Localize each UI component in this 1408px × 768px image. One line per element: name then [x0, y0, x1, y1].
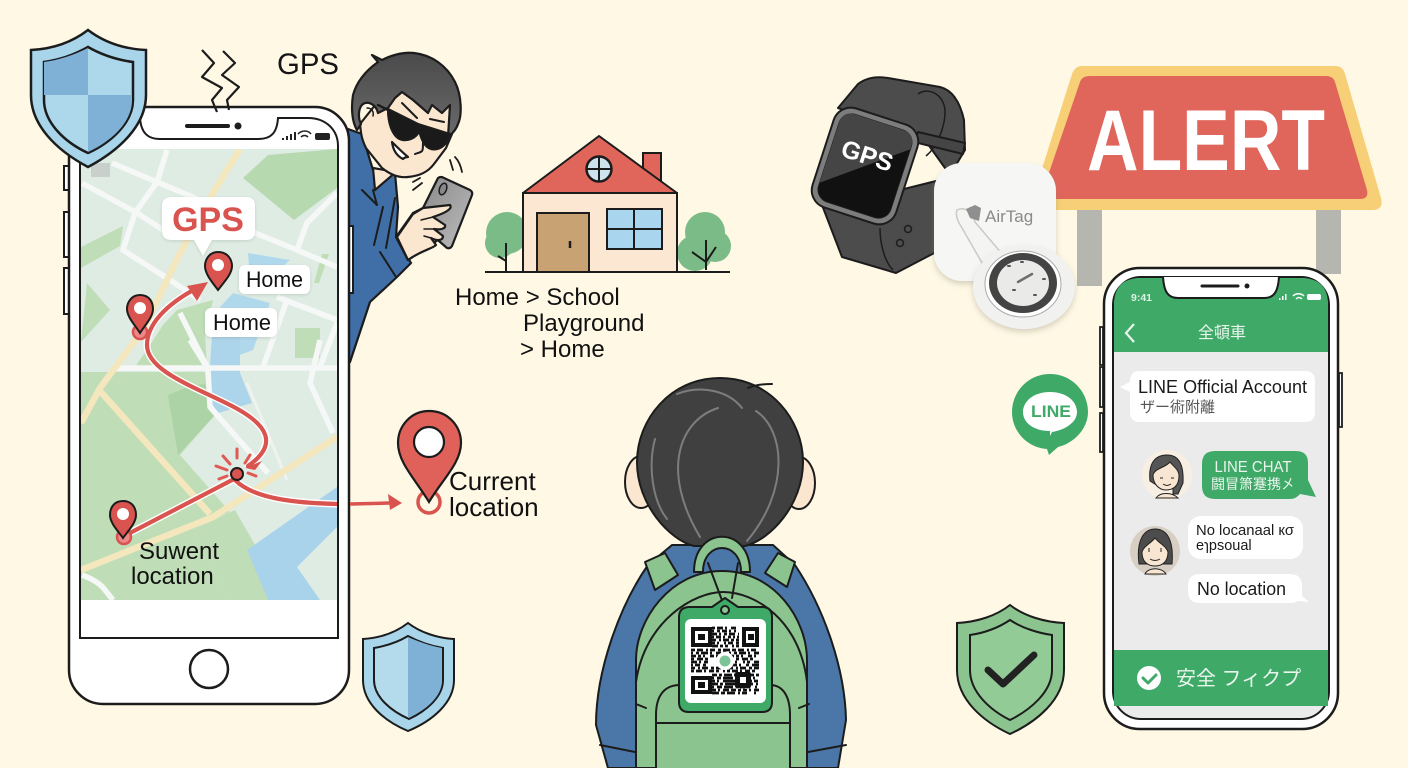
app header: [1114, 277, 1328, 352]
callout: GPS: [162, 197, 255, 256]
pin: start: [110, 501, 136, 544]
illustration: GPS smartwatch: GPS: [838, 135, 897, 178]
app header: 9:41: [1131, 292, 1152, 304]
chat bubble: No location: No location: [1197, 579, 1286, 599]
callout: GPS: GPS: [172, 201, 244, 239]
avatar: woman 1: [1142, 450, 1192, 500]
illustration: AirTag and case: [934, 163, 1075, 329]
avatar: woman 2: [1130, 526, 1180, 576]
burst marker: [216, 449, 256, 480]
chat bubble: LINE Official Account: ザー術附離: [1140, 399, 1215, 416]
icon: small blue shield: [363, 623, 454, 731]
chat bubble: LINE Official Account: LINE Official Account: [1138, 377, 1307, 397]
chat bubble: No location: [1188, 574, 1309, 603]
text: route Home School Playground: Home > School: [455, 284, 620, 311]
label: Current location: location: [449, 492, 539, 522]
hair: [637, 378, 803, 546]
phone frame: [1100, 268, 1342, 729]
label: Current location: Current: [449, 466, 536, 496]
icon: interference squiggles: [202, 50, 239, 112]
chat bubble: LINE CHAT: LINE CHAT: [1214, 459, 1292, 476]
chat bubble: LINE CHAT: 闘冒箫蹇携㐅: [1211, 476, 1295, 492]
arrow: to current location: [350, 494, 402, 510]
footer bar: safety button: [1114, 650, 1328, 706]
small map marker: [91, 163, 110, 177]
face: [360, 85, 452, 177]
AirTag case label: AirTag: [985, 207, 1033, 226]
illustration: child from behind with backpack: [596, 378, 846, 768]
sunglasses: [378, 105, 392, 112]
panel: ALERT sign: ALERT: [1087, 93, 1325, 189]
panel: ALERT sign: [1030, 66, 1382, 286]
icon: green check shield: [957, 605, 1064, 734]
smile: [392, 142, 408, 159]
pin: current location: [398, 411, 461, 513]
pin: home: [205, 252, 232, 290]
ears: [625, 456, 657, 508]
illustration: GPS smartwatch: [807, 77, 965, 273]
held phone and hand: [396, 208, 438, 260]
panel: left smartphone with GPS map: [64, 107, 353, 704]
chat bubble: No locanaal: No locanaal кσ: [1196, 523, 1294, 539]
footer bar: safety button: 安全 フィクプ: [1176, 667, 1301, 690]
heading: GPS: GPS: [277, 48, 339, 81]
hair: [352, 53, 461, 137]
arms and jacket: [596, 545, 846, 768]
straps: [645, 553, 678, 590]
map: [81, 149, 337, 600]
illustration: man in sunglasses spying with phone: [345, 53, 472, 362]
icon: LINE speech bubble: LINE: [1031, 402, 1071, 421]
chat bubble: No locanaal: [1188, 516, 1303, 559]
icon: large shield top left: [31, 30, 146, 167]
route line: [126, 288, 337, 535]
phone body: [64, 107, 353, 704]
chat bubble: LINE Official Account: [1120, 371, 1315, 422]
QR tag: [679, 563, 772, 712]
chat bubble: No locanaal: eɿpsoual: [1196, 538, 1252, 554]
handle: [694, 537, 750, 572]
callout: Home 1: Home: [246, 267, 303, 292]
pin: waypoint: [127, 295, 153, 339]
chat bubble: LINE CHAT: [1202, 451, 1316, 499]
text: route Home School Playground: > Home: [520, 336, 605, 363]
icon: house with trees: [485, 136, 731, 272]
map label: Suwent location: Suwent: [139, 538, 219, 565]
text: route Home School Playground: Playground: [523, 310, 644, 337]
panel: right smartphone with LINE chat: [1100, 268, 1342, 729]
map label: Suwent location: location: [131, 563, 214, 590]
icon: LINE speech bubble: [1012, 374, 1088, 455]
backpack body: [636, 571, 807, 768]
callout: Home 2: Home: [213, 310, 271, 335]
app header: 全頓車: [1198, 324, 1246, 342]
